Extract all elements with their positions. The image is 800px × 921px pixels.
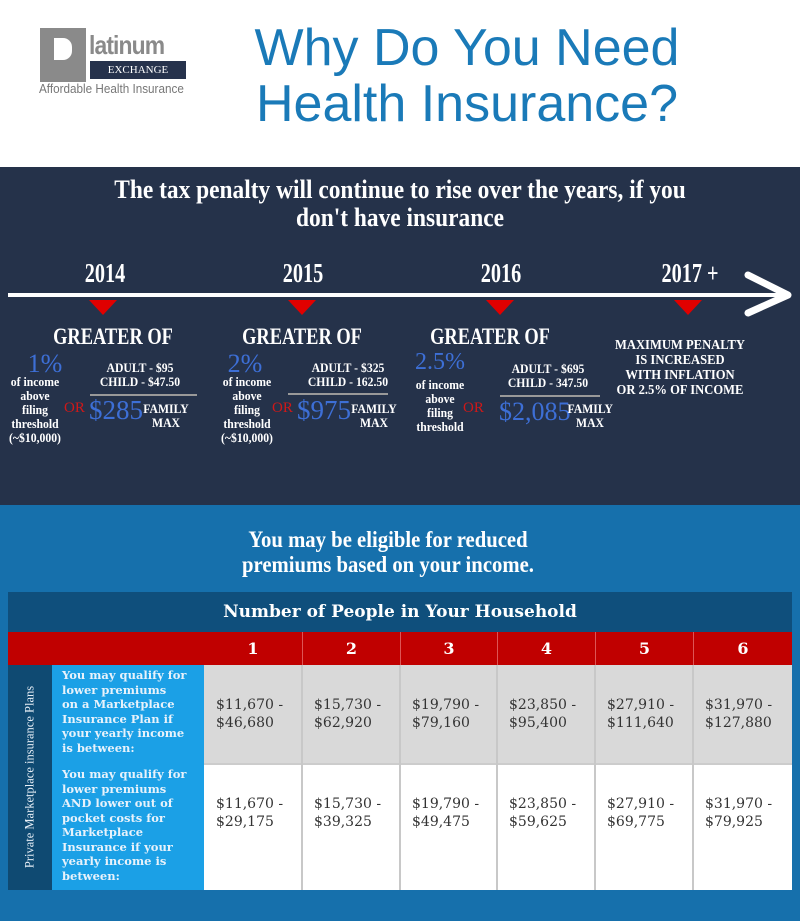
block 2015: 2%	[228, 349, 262, 378]
block 2015: ADULT - $325	[312, 360, 384, 375]
block 2017: WITH INFLATION	[625, 368, 735, 383]
row 2	[52, 763, 792, 890]
row 1: is between:	[62, 740, 135, 754]
row 2: $11,670 -	[216, 796, 283, 812]
row 1: $62,920	[314, 715, 372, 731]
block 2015: $975	[297, 395, 351, 425]
block 2015: FAMILY	[351, 401, 397, 416]
row 1: $11,670 -	[216, 697, 283, 713]
row 2: $29,175	[216, 814, 274, 830]
table	[8, 592, 792, 890]
row 2: $15,730 -	[314, 796, 381, 812]
row 1: $19,790 -	[412, 697, 479, 713]
panel: tax penalty: 2016	[481, 258, 521, 288]
block 2017: OR 2.5% OF INCOME	[617, 383, 743, 398]
panel: tax penalty	[0, 167, 800, 505]
block 2014: $285	[89, 395, 143, 425]
row 2: $49,475	[412, 814, 470, 830]
row 1: on a Marketplace	[62, 697, 175, 711]
column numbers: 5	[639, 639, 650, 658]
heading: The tax penalty will continue to rise over the years, if you	[114, 175, 686, 204]
block 2014: GREATER OF	[53, 324, 173, 349]
block 2015: (~$10,000)	[221, 430, 273, 445]
block 2015: CHILD - 162.50	[308, 374, 388, 389]
row 1: $27,910 -	[607, 697, 674, 713]
block 2014	[9, 324, 197, 445]
logo: latinum	[89, 30, 164, 60]
title: Why Do You Need	[255, 19, 679, 77]
logo	[39, 28, 186, 96]
block 2015: GREATER OF	[242, 324, 362, 349]
row 1: $15,730 -	[314, 697, 381, 713]
block 2016: MAX	[576, 415, 604, 430]
block 2016: of income	[416, 377, 464, 392]
side label	[8, 665, 52, 890]
column numbers: 2	[346, 639, 357, 658]
subheading: premiums based on your income.	[242, 552, 534, 577]
timeline arrow	[8, 272, 792, 316]
block 2015: OR	[272, 400, 293, 416]
title: Health Insurance?	[256, 75, 678, 133]
side label: Private Marketplace insurance Plans	[22, 686, 36, 868]
block 2017	[615, 338, 745, 398]
row 1: $23,850 -	[509, 697, 576, 713]
row 2: $69,775	[607, 814, 665, 830]
block 2014: CHILD - $47.50	[100, 374, 180, 389]
column numbers: 1	[247, 639, 259, 658]
block 2016: above	[425, 391, 455, 406]
row 2: lower premiums	[62, 782, 166, 796]
block 2015: MAX	[360, 415, 388, 430]
block 2015: filing	[234, 402, 260, 417]
row 1: $79,160	[412, 715, 470, 731]
row 1: your yearly income	[62, 726, 184, 740]
block 2014: 1%	[28, 349, 62, 378]
row 2: pocket costs for	[62, 810, 165, 824]
block 2017: IS INCREASED	[635, 353, 725, 368]
block 2017: MAXIMUM PENALTY	[615, 338, 745, 353]
row 2: $59,625	[509, 814, 567, 830]
block 2014: OR	[64, 400, 85, 416]
block 2015: above	[232, 388, 262, 403]
subheading	[242, 527, 534, 577]
block 2014: MAX	[152, 415, 180, 430]
row 1	[52, 665, 792, 763]
row 2: yearly income is	[62, 854, 166, 868]
row 2: You may qualify for	[62, 767, 186, 781]
row 1: You may qualify for	[62, 668, 186, 682]
row 1: Insurance Plan if	[62, 712, 173, 726]
heading: don't have insurance	[296, 203, 504, 232]
row 1: $111,640	[607, 715, 674, 731]
block 2016: threshold	[416, 419, 464, 434]
row 2: $27,910 -	[607, 796, 674, 812]
block 2014: (~$10,000)	[9, 430, 61, 445]
subheading: You may be eligible for reduced	[248, 527, 528, 552]
row 2: Marketplace	[62, 825, 143, 839]
row 2: AND lower out of	[62, 796, 173, 810]
block 2014: filing	[22, 402, 48, 417]
heading	[114, 175, 686, 232]
block 2014: above	[20, 388, 50, 403]
block 2014: threshold	[11, 416, 59, 431]
block 2016: CHILD - 347.50	[508, 375, 588, 390]
row 1: $46,680	[216, 715, 274, 731]
column numbers: 3	[443, 639, 455, 658]
row 2: $23,850 -	[509, 796, 576, 812]
column numbers	[8, 632, 792, 665]
column dividers	[301, 665, 694, 890]
years: 2014	[85, 258, 125, 288]
logo: Affordable Health Insurance	[39, 81, 184, 96]
row 1: $31,970 -	[705, 697, 772, 713]
table header	[8, 592, 792, 632]
row 2: $19,790 -	[412, 796, 479, 812]
row 1: lower premiums	[62, 682, 166, 696]
row 1: $95,400	[509, 715, 567, 731]
block 2016: 2.5%	[415, 349, 465, 375]
row 2: $31,970 -	[705, 796, 772, 812]
block 2015: of income	[223, 374, 271, 389]
block 2016: OR	[463, 400, 484, 416]
row 2: between:	[62, 868, 120, 882]
panel: reduced premiums	[0, 505, 800, 921]
markers	[89, 300, 117, 315]
logo: EXCHANGE	[108, 64, 168, 76]
block 2014: FAMILY	[143, 401, 189, 416]
block 2016: filing	[427, 405, 453, 420]
block 2016: FAMILY	[568, 401, 613, 416]
row 1: $127,880	[705, 715, 772, 731]
panel: tax penalty: 2017 +	[661, 258, 719, 288]
block 2016: GREATER OF	[430, 324, 550, 349]
block 2015	[221, 324, 397, 445]
block 2015: threshold	[223, 416, 271, 431]
panel: tax penalty: 2015	[283, 258, 323, 288]
block 2014: of income	[11, 374, 59, 389]
row 2: $79,925	[705, 814, 763, 830]
table header: Number of People in Your Household	[223, 602, 577, 622]
block 2016	[415, 324, 613, 434]
row 2: $39,325	[314, 814, 372, 830]
row 2: Insurance if your	[62, 840, 173, 854]
block 2014: ADULT - $95	[107, 360, 173, 375]
block 2016: $2,085	[499, 397, 570, 426]
column numbers: 6	[737, 639, 749, 658]
column numbers: 4	[541, 639, 552, 658]
block 2016: ADULT - $695	[512, 361, 584, 376]
title	[254, 19, 679, 133]
